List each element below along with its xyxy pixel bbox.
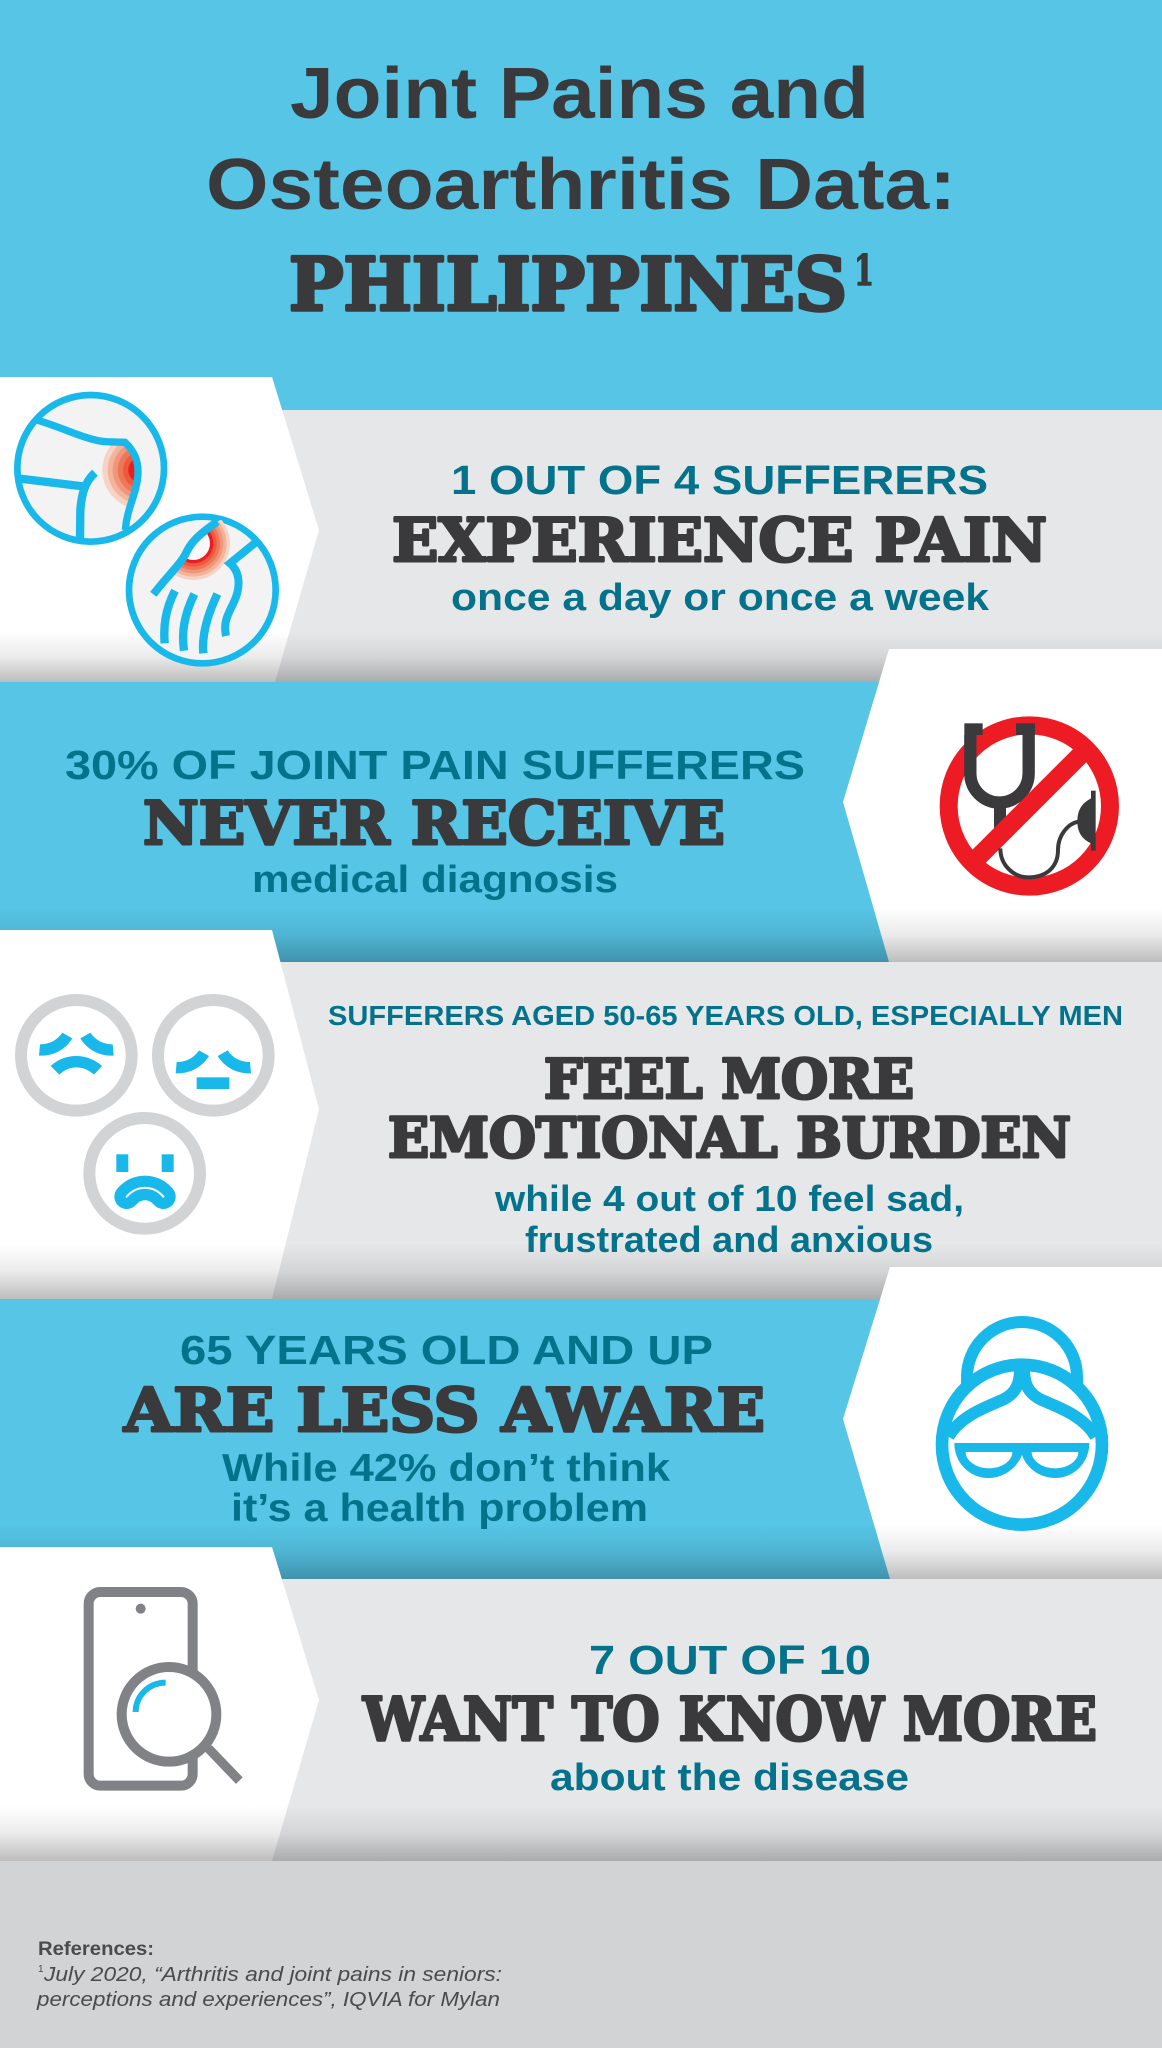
text: 1 out of 4: EXPERIENCE PAIN — [392, 506, 1047, 576]
text: 30 percent: NEVER RECEIVE — [143, 789, 725, 859]
text: emotional burden: frustrated and anxious — [525, 1219, 933, 1260]
text: 7 out of 10: 7 OUT OF 10 — [589, 1637, 871, 1683]
panel: want to know more — [0, 1547, 1162, 1861]
text: less aware: ARE LESS AWARE — [123, 1376, 765, 1446]
text: 1 out of 4: 1 OUT OF 4 SUFFERERS — [451, 457, 988, 503]
panel: references — [0, 1861, 1162, 2048]
text: 1 out of 4: once a day or once a week — [451, 577, 990, 619]
text: 7 out of 10: WANT TO KNOW MORE — [362, 1685, 1097, 1755]
text: emotional burden: FEEL MORE — [544, 1047, 914, 1111]
header — [206, 54, 956, 328]
icon: phone and magnifier — [89, 1592, 239, 1786]
icon: sad faces — [21, 1000, 269, 1229]
panel: emotional burden — [0, 930, 1162, 1299]
text: 7 out of 10 — [362, 1637, 1097, 1799]
title — [206, 54, 956, 225]
references text: perceptions and experiences”, IQVIA for Mylan — [36, 1989, 500, 2011]
text: 7 out of 10: about the disease — [550, 1757, 909, 1799]
icon: knee and hand joint pain — [17, 395, 276, 663]
text: less aware: it’s a health problem — [231, 1487, 648, 1530]
panel: never receive — [0, 649, 1162, 962]
text: emotional burden — [328, 1000, 1123, 1260]
references text: References: — [38, 1939, 154, 1960]
text: less aware: 65 YEARS OLD AND UP — [180, 1327, 713, 1373]
text: 30 percent — [65, 742, 805, 901]
text: 30 percent: medical diagnosis — [252, 859, 618, 901]
heading: Philippines: 1 — [854, 246, 874, 295]
icon: no stethoscope — [949, 723, 1110, 887]
references text: July 2020, “Arthritis and joint pains in seniors: — [43, 1964, 502, 1986]
text: 30 percent: 30% OF JOINT PAIN SUFFERERS — [65, 742, 805, 788]
text: emotional burden: SUFFERERS AGED 50-65 YEARS OLD, ESPECIALLY MEN — [328, 1000, 1123, 1031]
panel: less aware — [0, 1267, 1162, 1579]
references text — [36, 1939, 502, 2011]
text: less aware — [123, 1327, 765, 1530]
title: Osteoarthritis Data: — [206, 145, 956, 225]
icon: elderly woman — [942, 1322, 1102, 1525]
text: less aware: While 42% don’t think — [222, 1447, 670, 1490]
heading: Philippines: PHILIPPINES — [289, 242, 847, 328]
text: emotional burden: while 4 out of 10 feel sad, — [494, 1178, 964, 1219]
references text: 1 — [38, 1964, 44, 1975]
panel: experience pain — [0, 377, 1162, 682]
text: 1 out of 4 — [392, 457, 1047, 619]
text: emotional burden: EMOTIONAL BURDEN — [388, 1105, 1071, 1170]
title: Joint Pains and — [290, 54, 869, 134]
